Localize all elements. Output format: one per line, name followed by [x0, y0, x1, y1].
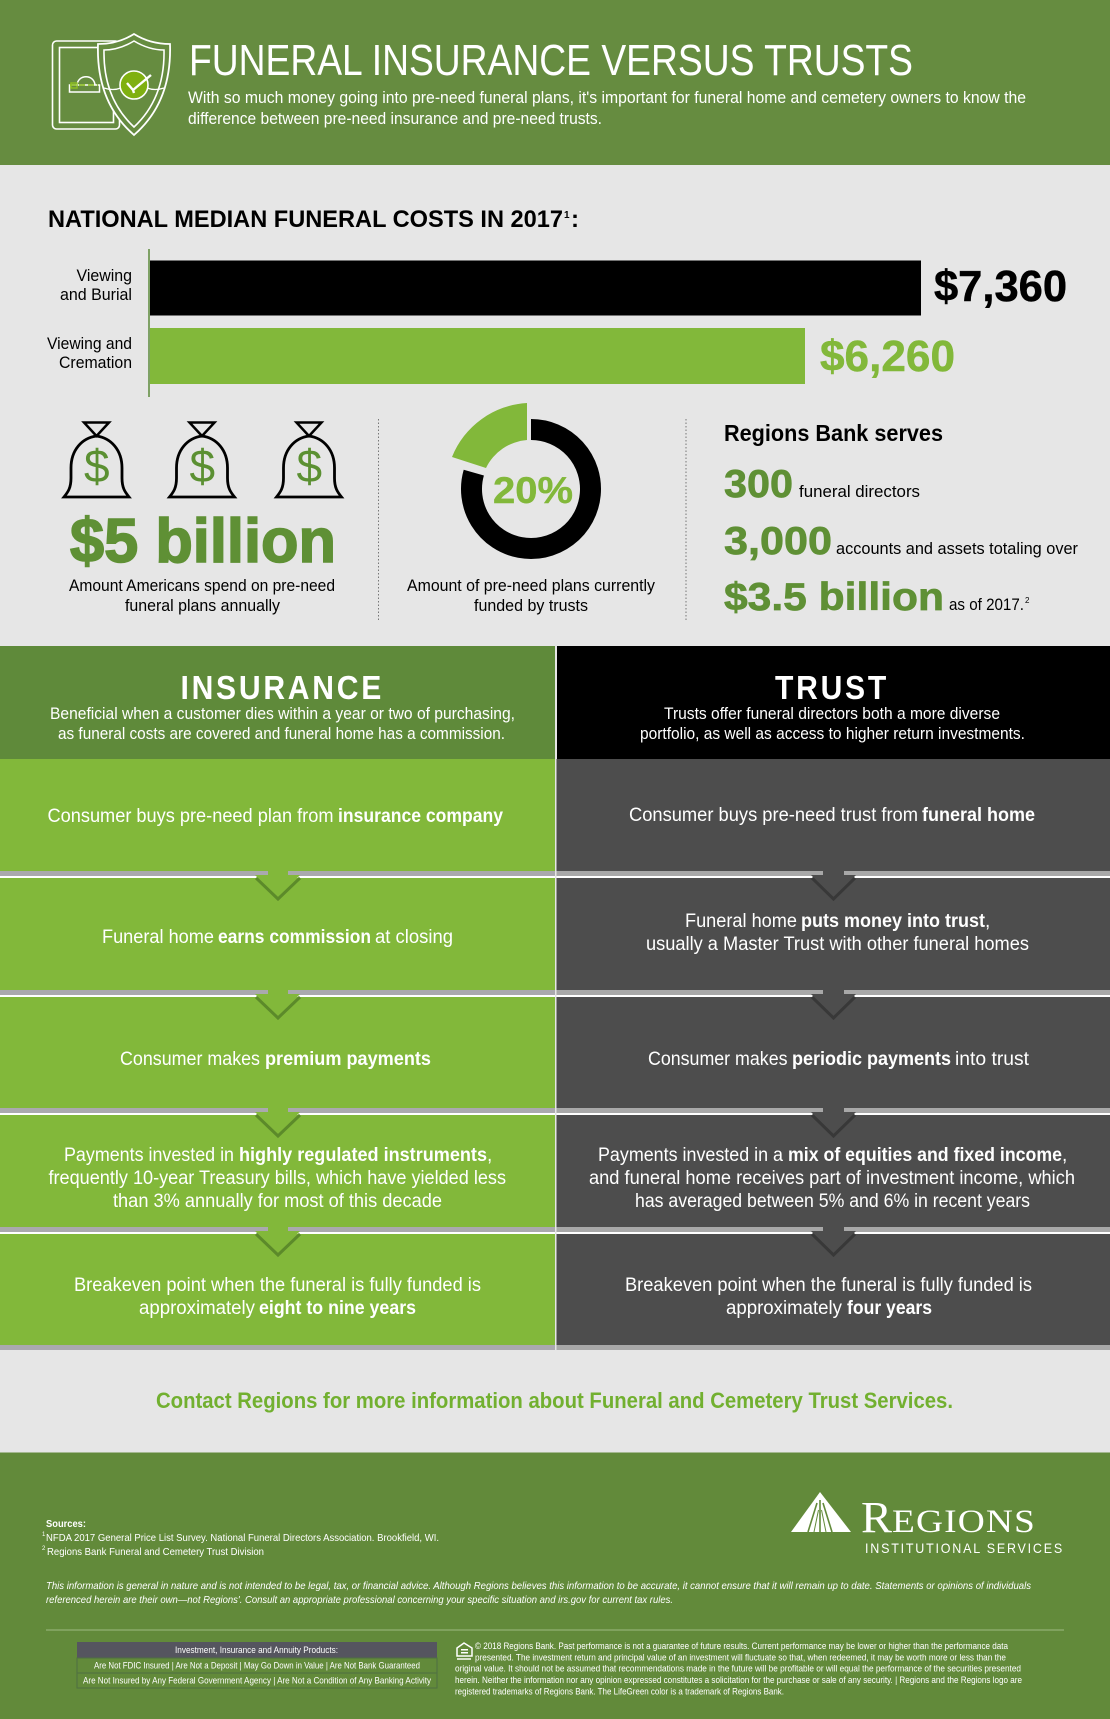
- $3.5 billion: 2: [1025, 596, 1030, 605]
- caption: Amount Americans spend on pre-need: [69, 576, 335, 595]
- 3,000 accounts: accounts and assets totaling over: [836, 539, 1078, 558]
- icon: equal housing lender: [457, 1643, 472, 1660]
- donut chart: [452, 403, 590, 548]
- logo: Regions Institutional Services: EGIONS: [892, 1504, 1036, 1540]
- panel: trust header: TRUST: [775, 669, 889, 706]
- header banner: [0, 0, 1110, 165]
- $3.5 billion: $3.5 billion: [724, 576, 944, 619]
- step 2: [646, 911, 1029, 955]
- step 5: [74, 1275, 481, 1319]
- copyright text: registered trademarks of Regions Bank. The LifeGreen color is a trademark of Regions Bank.: [455, 1686, 784, 1696]
- copyright text: [455, 1641, 1022, 1696]
- disclaimer: referenced herein are their own—not Regions'. Consult an appropriate professional concerning your specific situation and irs.gov for current tax rules.: [46, 1594, 673, 1606]
- panel: insurance steps: [0, 759, 555, 1350]
- step 3: [648, 1049, 1030, 1070]
- arrow: [255, 871, 300, 899]
- intro text: difference between pre-need insurance and pre-need trusts.: [188, 109, 602, 128]
- icon: money bags: [64, 422, 342, 497]
- step 5: approximately: [726, 1298, 842, 1319]
- step 2: Funeral home: [102, 927, 214, 948]
- panel: insurance header: INSURANCE: [180, 669, 384, 706]
- panel: trust header: [557, 646, 1110, 759]
- bar label: viewing and cremation: [47, 334, 132, 372]
- bar label: viewing and burial: Viewing: [76, 266, 132, 285]
- step 4: [589, 1145, 1075, 1212]
- 300 funeral directors: 300: [724, 463, 793, 506]
- step 1: Consumer buys pre-need trust from: [629, 805, 918, 826]
- heading: Regions Bank serves: [724, 420, 943, 446]
- step 2: usually a Master Trust with other funeral homes: [646, 934, 1029, 955]
- stat: Regions Bank serves: [724, 420, 1078, 619]
- arrow: [811, 1108, 856, 1136]
- bar label: viewing and cremation: Cremation: [59, 353, 132, 372]
- step 4: ,: [487, 1145, 492, 1166]
- step 5: four years: [847, 1298, 932, 1319]
- step 4: has averaged between 5% and 6% in recent years: [635, 1191, 1030, 1212]
- step 4: than 3% annually for most of this decade: [113, 1191, 442, 1212]
- step 4: frequently 10-year Treasury bills, which have yielded less: [48, 1168, 506, 1189]
- step 2: at closing: [375, 927, 453, 948]
- logo: Regions Institutional Services: [791, 1492, 1064, 1556]
- caption: [69, 576, 335, 615]
- copyright text: original value. It should not be assumed that recommendations made in the future will be profitable or will equal the performance of the securities presented: [455, 1664, 1021, 1674]
- caption: funeral plans annually: [125, 596, 280, 615]
- icon: money bags: $: [296, 440, 322, 492]
- icon: money bags: $: [190, 440, 215, 492]
- product disclosure box: Investment, Insurance and Annuity Products:: [175, 1645, 338, 1656]
- step 1: funeral home: [922, 805, 1035, 826]
- step 3: [120, 1049, 431, 1070]
- 3,000 accounts: [724, 520, 1078, 563]
- sources: 2: [42, 1546, 46, 1552]
- icon: document and shield with check: [52, 34, 170, 135]
- sources: NFDA 2017 General Price List Survey. National Funeral Directors Association. Brookfield, WI.: [46, 1532, 439, 1544]
- bar label: viewing and cremation: Viewing and: [47, 334, 132, 353]
- step 3: Consumer makes: [120, 1049, 260, 1070]
- dotted divider: [378, 419, 380, 621]
- logo: Regions Institutional Services: INSTITUTIONAL SERVICES: [865, 1540, 1064, 1556]
- bar label: viewing and burial: and Burial: [60, 285, 132, 304]
- stat: 20 percent donut: [407, 403, 655, 615]
- panel: trust header: portfolio, as well as access to higher return investments.: [640, 724, 1025, 743]
- step 4: mix of equities and fixed income: [788, 1145, 1062, 1166]
- arrow: [811, 1227, 856, 1255]
- panel: trust steps: [556, 759, 1110, 1350]
- 3,000 accounts: 3,000: [724, 520, 832, 563]
- heading: national median funeral costs: :: [571, 206, 579, 233]
- icon: money bags: $: [84, 440, 110, 492]
- heading: national median funeral costs: NATIONAL MEDIAN FUNERAL COSTS IN 2017: [48, 206, 563, 233]
- step 1: [48, 806, 503, 827]
- $3.5 billion: [724, 576, 1030, 619]
- caption: [407, 576, 655, 615]
- footer: [0, 1452, 1110, 1719]
- copyright text: presented. The investment return and principal value of an investment will fluctuate so that, when redeemed, it may be worth more or less than the: [475, 1652, 1006, 1662]
- step 5: approximately: [139, 1298, 255, 1319]
- step 1: Consumer buys pre-need plan from: [48, 806, 334, 827]
- bar: viewing and burial: [150, 260, 921, 316]
- sources: 1: [42, 1532, 46, 1538]
- step 4: Payments invested in a: [598, 1145, 783, 1166]
- step 5: Breakeven point when the funeral is fully funded is: [625, 1275, 1032, 1296]
- step 2: [102, 927, 453, 948]
- stat: $5 billion: [64, 422, 342, 615]
- panel: insurance header: as funeral costs are covered and funeral home has a commission.: [58, 724, 505, 743]
- bar label: viewing and burial: [60, 266, 132, 304]
- product disclosure box: [77, 1642, 437, 1688]
- step 3: premium payments: [265, 1049, 431, 1070]
- sources: [42, 1518, 439, 1558]
- step 3: Consumer makes: [648, 1049, 788, 1070]
- step 4: highly regulated instruments: [239, 1145, 487, 1166]
- logo: Regions Institutional Services: R: [861, 1493, 893, 1542]
- product disclosure box: Are Not Insured by Any Federal Government Agency | Are Not a Condition of Any Banking Activity: [83, 1676, 431, 1686]
- caption: Amount of pre-need plans currently: [407, 576, 655, 595]
- title: FUNERAL INSURANCE VERSUS TRUSTS: [189, 36, 913, 85]
- step 4: Payments invested in: [64, 1145, 234, 1166]
- step 2: ,: [985, 911, 990, 932]
- sources: Regions Bank Funeral and Cemetery Trust Division: [47, 1546, 264, 1558]
- arrow: [811, 990, 856, 1018]
- intro text: With so much money going into pre-need funeral plans, it's important for funeral home and cemetery owners to know the: [188, 88, 1026, 107]
- copyright text: herein. Neither the information nor any opinion expressed constitutes a solicitation for the purchase or sale of any security. | Regions and the Regions logo are: [455, 1675, 1022, 1685]
- bar: viewing and cremation: [150, 328, 805, 384]
- step 5: eight to nine years: [259, 1298, 416, 1319]
- step 4: [48, 1145, 506, 1212]
- copyright text: © 2018 Regions Bank. Past performance is not a guarantee of future results. Current performance may be lower or higher than the performance data: [475, 1641, 1008, 1651]
- step 2: Funeral home: [685, 911, 797, 932]
- percent label: 20%: [493, 470, 573, 511]
- sources: Sources:: [46, 1518, 86, 1530]
- arrow: [255, 990, 300, 1018]
- step 2: earns commission: [218, 927, 371, 948]
- step 3: into trust: [955, 1049, 1030, 1070]
- panel: trust header: Trusts offer funeral directors both a more diverse: [664, 704, 1000, 723]
- step 3: periodic payments: [792, 1049, 951, 1070]
- disclaimer: This information is general in nature and is not intended to be legal, tax, or financial advice. Although Regions believes this information to be accurate, it cannot ensure that it will remain up to date. Statements or opinions of individuals: [46, 1580, 1032, 1592]
- arrow: [811, 871, 856, 899]
- step 5: [625, 1275, 1032, 1319]
- intro text: [188, 88, 1026, 128]
- call to action: Contact Regions for more information about Funeral and Cemetery Trust Services.: [156, 1388, 953, 1413]
- big number: $5 billion: [70, 507, 336, 576]
- step 4: and funeral home receives part of investment income, which: [589, 1168, 1075, 1189]
- caption: funded by trusts: [474, 596, 588, 615]
- 300 funeral directors: [724, 463, 920, 506]
- step 2: puts money into trust: [801, 911, 986, 932]
- step 1: insurance company: [338, 806, 503, 827]
- value: $7,360: $7,360: [934, 262, 1067, 311]
- 300 funeral directors: funeral directors: [799, 482, 920, 501]
- arrow: [255, 1227, 300, 1255]
- step 5: Breakeven point when the funeral is fully funded is: [74, 1275, 481, 1296]
- icon: Regions triangle: [791, 1492, 851, 1532]
- value: $6,260: $6,260: [820, 332, 955, 381]
- disclaimer: [46, 1580, 1032, 1606]
- step 4: ,: [1062, 1145, 1067, 1166]
- bar chart: funeral costs: [47, 249, 1067, 397]
- arrow: [255, 1108, 300, 1136]
- heading: national median funeral costs: 1: [564, 210, 570, 221]
- panel: insurance header: [0, 646, 555, 759]
- product disclosure box: Are Not FDIC Insured | Are Not a Deposit | May Go Down in Value | Are Not Bank Guaranteed: [94, 1660, 420, 1672]
- panel: insurance header: Beneficial when a customer dies within a year or two of purchasing,: [50, 704, 515, 723]
- $3.5 billion: as of 2017.: [949, 595, 1024, 614]
